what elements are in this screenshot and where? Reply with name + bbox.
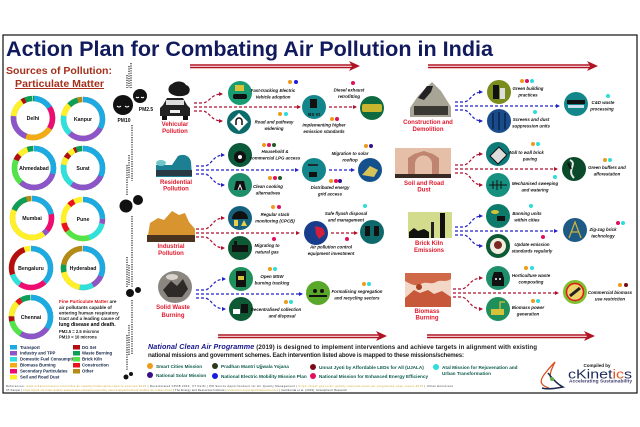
label: diesel exhaust retrofitting: Diesel exhaust: [334, 88, 365, 92]
label: banning units within cities: within cities: [514, 218, 540, 222]
label: safe flyash disposal and management: and management: [328, 218, 365, 222]
label: mechanised sweeping and watering: and watering: [521, 188, 549, 192]
panel: construction and demolition: Construction and: [403, 120, 453, 126]
label: green buffers and afforestation: [588, 158, 626, 176]
label: zig-zag brick technology: technology: [591, 234, 615, 238]
panel: brick kiln emissions: Emissions: [414, 248, 445, 254]
label: implementing higher emission standards: [302, 117, 346, 134]
label: formalising segregation and recycling sectors: and recycling sectors: [334, 296, 380, 300]
panel: residential pollution: Pollution: [163, 186, 189, 192]
legend: Brick Kiln: [82, 356, 102, 362]
label: fast-tracking electric vehicle adoption: Fast-tracking Electric: [251, 88, 296, 93]
legend: [10, 345, 113, 380]
label: zig-zag brick technology: Zig-zag brick: [588, 227, 617, 232]
label: C&D waste processing: processing: [589, 106, 614, 112]
label: wall to wall brick paving: Wall to wall brick: [508, 150, 544, 155]
text block: fine particulate matter: PM10 = 10 microns: [59, 334, 97, 340]
missions legend: Pradhan Mantri Ujjwala Yojana: [221, 364, 289, 369]
panel: solid waste burning: Burning: [162, 313, 185, 319]
text block: national clean air programme: [148, 342, 537, 359]
label: decentralised collection and disposal: and disposal: [269, 314, 296, 318]
label: biomass power generation: generation: [516, 312, 540, 316]
donut: Chennai: Chennai: [21, 315, 42, 321]
label: green buffers and afforestation: afforestation: [594, 172, 621, 176]
donut: Delhi: [14, 98, 52, 138]
text block: national clean air programme: National Clean Air Programme (2019) is designed to implement interventions and achieve targets in alignment with existing: [148, 342, 537, 351]
heading: sources of pollution: [6, 66, 112, 90]
title: Action Plan for Combating Air Pollution in India: [6, 37, 494, 61]
label: road and pathway widening: [255, 112, 294, 131]
donut: Mumbai: [12, 198, 52, 238]
panel: brick kiln emissions: Brick Kiln: [415, 241, 443, 247]
text block: fine particulate matter: entering human respiratory: [59, 310, 119, 316]
panel: biomass burning: Burning: [416, 316, 439, 322]
label: clean cooking alternatives: Clean cooking: [253, 184, 283, 189]
legend: Waste Burning: [82, 350, 113, 356]
label: update emission standards regularly: standards regularly: [512, 248, 553, 254]
label: zig-zag brick technology: [588, 221, 625, 238]
label: horticulture waste composting: composting: [519, 280, 544, 284]
label: regular stack monitoring: [255, 205, 295, 224]
heading: sources of pollution: Particulate Matter: [15, 79, 104, 90]
legend: Transport: [20, 345, 40, 350]
label: migrating to natural gas: natural gas: [255, 250, 279, 254]
panel: biomass burning: [405, 266, 587, 322]
donut: Bengaluru: Bengaluru: [18, 266, 44, 272]
panel: brick kiln emissions: [408, 204, 587, 258]
panel: vehicular pollution: BS VI: [308, 112, 320, 117]
arrow: bottom left: [218, 331, 387, 341]
particle stream: PM2.5: [139, 107, 153, 113]
label: wall to wall brick paving: paving: [522, 156, 537, 162]
label: clean cooking alternatives: alternatives: [256, 190, 281, 196]
text block: fine particulate matter: lung disease and death.: [59, 322, 116, 328]
panel: vehicular pollution: Vehicular: [162, 122, 189, 128]
panel: vehicular pollution: Pollution: [162, 129, 188, 135]
missions legend: Urban Transformation: [442, 371, 491, 376]
label: open MSW burning tracking: burning tracking: [255, 280, 290, 286]
logo: cKinetics: Compiled by: [583, 363, 611, 368]
donut: Pune: Pune: [77, 217, 89, 223]
donut: Ahmedabad: [14, 148, 54, 188]
label: C&D waste processing: [589, 94, 615, 112]
label: migration to solar rooftop: rooftop: [342, 158, 358, 162]
arrow: bottom right: [427, 331, 595, 341]
panel: residential pollution: [156, 143, 382, 197]
label: implementing higher emission standards: Implementing higher: [302, 122, 346, 128]
panel: industrial pollution: Pollution: [158, 251, 184, 257]
references: References: www.urbanemissions.info/india-air-quality/india-apna-reports-sources-2018 | Recalculated CPCB 2010, IIT Delhi | PM Source Apportionment for Air Quality Management | https://moef.gov.in/air-quality-national-clean-air-programme-ncap-report-2019 | Urban Emissions: [6, 384, 454, 388]
label: commercial biomass use restriction: use restriction: [595, 296, 625, 302]
panel: biomass burning: Biomass: [414, 309, 440, 315]
label: distributed energy grid access: Distributed energy: [311, 185, 350, 190]
label: diesel exhaust retrofitting: [334, 81, 365, 99]
label: regular stack monitoring: monitoring (CPCB): [255, 218, 295, 224]
text block: fine particulate matter: PM2.5 = 2.5 microns: [59, 329, 100, 334]
panel: soil and road dust: Soil and Road: [404, 181, 444, 187]
legend: Other: [82, 368, 94, 374]
missions legend: National Solar Mission: [156, 373, 206, 378]
label: mechanised sweeping and watering: Mechanised sweeping: [512, 181, 558, 186]
missions legend: National Electric Mobility Mission Plan: [221, 374, 307, 379]
label: mechanised sweeping and watering: [512, 175, 558, 192]
missions legend: Unnat Jyoti by Affordable LEDs for All (UJALA): [319, 365, 424, 370]
logo: cKinetics: cKinet ics: [568, 366, 633, 382]
label: implementing higher emission standards: emission standards: [303, 129, 345, 134]
panel: residential pollution: Residential: [160, 180, 192, 186]
missions legend: Smart Cities Mission: [156, 364, 202, 369]
donut: Hyderabad: Hyderabad: [70, 266, 96, 272]
label: commercial biomass use restriction: Commercial biomass: [588, 290, 633, 295]
logo: cKinetics: [541, 362, 633, 389]
donut: Delhi: Delhi: [27, 116, 40, 122]
missions legend: Atal Mission for Rejuvenation and: [442, 365, 518, 370]
references: [6, 384, 454, 392]
particle stream: PM10: [117, 118, 131, 124]
donut: Mumbai: Mumbai: [22, 216, 42, 222]
donut: Ahmedabad: Ahmedabad: [19, 166, 49, 172]
label: clean cooking alternatives: [253, 176, 283, 196]
label: banning units within cities: [512, 204, 542, 222]
donut: Bengaluru: [12, 248, 50, 288]
donut: Surat: [64, 148, 102, 188]
panel: solid waste burning: [156, 267, 330, 321]
label: screens and dust suppression units: suppression units: [512, 124, 550, 128]
panel: soil and road dust: Dust: [417, 188, 431, 194]
label: air pollution control equipment investment: equipment investment: [308, 251, 355, 256]
donut: Kanpur: Kanpur: [74, 117, 92, 123]
label: road and pathway widening: Road and pathway: [255, 120, 294, 124]
label: formalising segregation and recycling sectors: [332, 282, 383, 300]
text block: fine particulate matter: [59, 299, 120, 340]
panel: construction and demolition: [403, 80, 588, 133]
legend: Secondary Particulates: [20, 368, 68, 374]
label: green building practices: Green building: [513, 86, 544, 91]
text block: fine particulate matter: Fine Particulate Matter are: [59, 299, 117, 304]
label: horticulture waste composting: Horticulture waste: [512, 273, 551, 278]
label: air pollution control equipment investment: Air pollution control: [309, 244, 353, 250]
legend: Construction: [82, 362, 109, 368]
donut: Kanpur: [64, 100, 102, 138]
arrow: top left: [190, 61, 360, 71]
label: open MSW burning tracking: [255, 267, 290, 286]
particle stream: [113, 63, 153, 380]
legend: Industry and TPP: [20, 350, 55, 356]
arrow: top right: [428, 61, 598, 71]
label: decentralised collection and disposal: Decentralised collection: [251, 307, 302, 312]
label: safe flyash disposal and management: [325, 204, 368, 222]
panel: construction and demolition: Demolition: [412, 127, 444, 133]
label: C&D waste processing: C&D waste: [592, 100, 615, 105]
references: IIT Kanpur | https://cpcb.nic.in/air-quality-assessment-emission-inventory-source-apportionment-studies-for-indian-cities | The Energy and Resources Institute | www.teriin.org/projects/apna/sources | Guttikunda et al. (2019), Atmospheric Research: [6, 388, 348, 392]
label: green buffers and afforestation: Green buffers and: [588, 165, 626, 170]
label: green building practices: practices: [517, 92, 538, 98]
text block: fine particulate matter: air pollutants capable of: [59, 305, 112, 310]
label: regular stack monitoring: Regular stack: [261, 212, 290, 217]
label: banning units within cities: Banning units: [512, 211, 542, 216]
text block: national clean air programme: national missions and government schemes. Each intervention listed above is mapped to these missions/schemes:: [148, 352, 464, 359]
label: safe flyash disposal and management: Safe flyash disposal: [325, 211, 368, 216]
label: migration to solar rooftop: [332, 144, 373, 162]
label: distributed energy grid access: [311, 179, 350, 196]
logo: cKinetics: Accelerating Sustainability: [569, 378, 632, 384]
label: diesel exhaust retrofitting: retrofitting: [338, 94, 360, 99]
label: fast-tracking electric vehicle adoption: Vehicle adoption: [256, 94, 291, 100]
legend: Domestic Fuel Consumption: [20, 356, 79, 362]
label: biomass power generation: [512, 299, 545, 316]
label: fast-tracking electric vehicle adoption: [251, 80, 298, 100]
label: update emission standards regularly: Update emission: [514, 242, 550, 247]
label: road and pathway widening: widening: [264, 126, 284, 131]
label: household and commercial LPG access: Household &: [261, 149, 289, 154]
label: decentralised collection and disposal: [251, 300, 302, 318]
label: household and commercial LPG access: [250, 143, 301, 160]
panel: soil and road dust: [395, 142, 586, 197]
label: migrating to natural gas: Migrating to: [254, 243, 280, 248]
panel: industrial pollution: Industrial: [157, 244, 185, 250]
donut: Pune: [64, 200, 102, 238]
label: biomass power generation: Biomass power: [512, 305, 545, 310]
label: screens and dust suppression units: [512, 110, 550, 128]
label: wall to wall brick paving: [508, 142, 544, 162]
missions legend: [147, 363, 518, 379]
label: household and commercial LPG access: commercial LPG access: [250, 156, 301, 160]
label: migration to solar rooftop: Migration to solar: [332, 151, 369, 156]
label: green building practices: [513, 79, 544, 98]
legend: Soil and Road Dust: [20, 374, 60, 380]
label: formalising segregation and recycling sectors: Formalising segregation: [332, 289, 383, 294]
panel: solid waste burning: Solid Waste: [156, 305, 191, 311]
label: open MSW burning tracking: Open MSW: [260, 274, 284, 279]
legend: DG Set: [82, 345, 97, 350]
label: air pollution control equipment investment: [308, 237, 355, 256]
donut: Chennai: [12, 298, 50, 336]
heading: sources of pollution: Sources of Pollution:: [6, 66, 112, 77]
text block: fine particulate matter: tract and a leading cause of: [59, 316, 120, 321]
legend: Biomass Burning: [20, 362, 56, 368]
label: migrating to natural gas: [254, 237, 280, 254]
donut: Hyderabad: [64, 248, 102, 288]
label: commercial biomass use restriction: [588, 283, 633, 302]
label: horticulture waste composting: [512, 266, 551, 284]
missions legend: National Mission for Enhanced Energy Efficiency: [319, 374, 429, 379]
label: screens and dust suppression units: Screens and dust: [513, 117, 550, 122]
label: update emission standards regularly: [512, 235, 553, 254]
panel: vehicular pollution: [160, 81, 384, 135]
donut: Surat: Surat: [76, 166, 90, 172]
panel: industrial pollution: [147, 206, 384, 260]
label: distributed energy grid access: grid access: [317, 192, 343, 196]
